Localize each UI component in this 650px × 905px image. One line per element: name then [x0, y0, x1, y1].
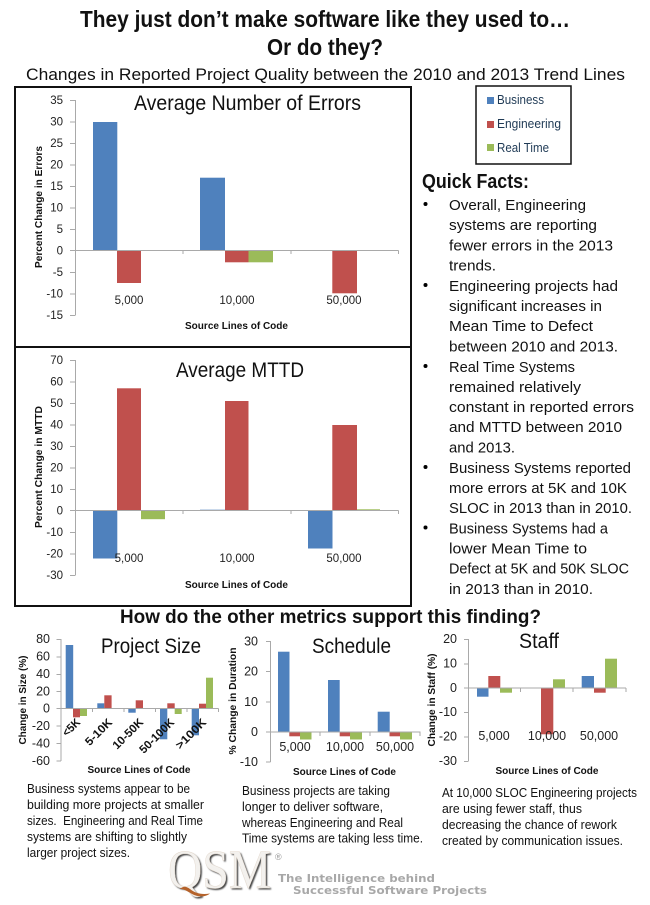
panel: staff	[426, 630, 637, 848]
category labels: errors: 5,000	[115, 295, 143, 307]
y axis labels: errors: -10	[46, 288, 63, 300]
y axis labels: MTTD: -10	[46, 527, 63, 539]
category labels: staff	[478, 729, 618, 743]
y axis labels: staff: 20	[443, 632, 457, 646]
logo: QSM: QSM	[170, 840, 272, 902]
chart title: staff: Staff	[519, 630, 559, 653]
commentary: schedule: Business projects are taking	[242, 784, 390, 798]
y axis labels: MTTD: 70	[50, 355, 63, 367]
commentary: schedule: Time systems are taking less time.	[242, 832, 423, 846]
panel: schedule	[227, 634, 423, 846]
y axis labels: MTTD: -20	[46, 548, 63, 560]
x axis title: staff: Source Lines of Code	[496, 765, 599, 777]
y axis title: staff: Change in Staff (%)	[426, 654, 438, 746]
legend: Engineering	[497, 117, 561, 131]
panel: project size	[17, 632, 218, 860]
quick facts list: in 2013 than in 2010.	[449, 581, 593, 598]
y axis labels: MTTD	[46, 355, 63, 582]
quick facts list: fewer errors in the 2013	[449, 237, 613, 254]
quick facts list: significant increases in	[449, 298, 602, 315]
category labels: errors: 10,000	[219, 295, 255, 307]
x axis title: MTTD: Source Lines of Code	[185, 579, 288, 591]
quick facts list	[424, 197, 634, 598]
title: Or do they?	[267, 34, 383, 60]
y axis labels: errors	[46, 95, 63, 322]
quick facts list: and 2013.	[449, 439, 515, 456]
chart title: errors: Average Number of Errors	[134, 92, 361, 115]
category labels: schedule: 10,000	[326, 740, 364, 754]
bar chart: staff	[464, 639, 626, 762]
quick facts list: Overall, Engineering	[449, 197, 586, 214]
y axis labels: errors: 15	[50, 181, 63, 193]
title: They just don’t make software like they used to…	[80, 6, 570, 32]
y axis labels: errors: 0	[57, 246, 63, 258]
rotated category labels: size: 5-10K	[83, 716, 116, 748]
bar chart: errors	[70, 100, 398, 316]
legend: Real Time	[497, 141, 549, 155]
category labels: MTTD: 10,000	[219, 553, 255, 565]
category labels: errors: 50,000	[326, 295, 362, 307]
subtitle: Changes in Reported Project Quality between the 2010 and 2013 Trend Lines	[26, 66, 625, 84]
y axis labels: MTTD: 30	[50, 441, 63, 453]
commentary: size: larger project sizes.	[27, 846, 130, 860]
legend	[476, 86, 571, 164]
y axis labels: MTTD: 10	[50, 484, 63, 496]
y axis labels: staff: 0	[450, 681, 457, 695]
commentary: staff: created by communication issues.	[442, 834, 623, 848]
category labels: staff: 50,000	[580, 729, 618, 743]
y axis title: errors: Percent Change in Errors	[33, 146, 45, 268]
y axis labels: errors: 10	[50, 202, 63, 214]
rotated category labels: size	[60, 716, 210, 756]
bar chart: project size	[56, 639, 218, 761]
y axis labels: staff: -30	[439, 754, 457, 768]
y axis labels: size: 80	[36, 632, 50, 646]
quick facts list: remained relatively	[449, 379, 582, 396]
commentary: staff: At 10,000 SLOC Engineering projects	[442, 786, 637, 800]
y axis labels: MTTD: 50	[50, 398, 63, 410]
commentary: staff	[442, 786, 637, 848]
category labels: errors	[115, 295, 362, 307]
y axis labels: MTTD: 0	[57, 506, 63, 518]
quick facts list: Business Systems reported	[449, 460, 631, 477]
y axis labels: errors: 5	[57, 224, 63, 236]
y axis labels: size: 60	[36, 649, 50, 663]
quick facts list: Engineering projects had	[449, 278, 618, 295]
y axis labels: schedule: -10	[240, 755, 258, 769]
y axis labels: errors: 25	[50, 138, 63, 150]
quick facts list: lower Mean Time to	[449, 540, 587, 558]
tagline: The Intelligence behind	[278, 872, 435, 885]
category labels: MTTD: 5,000	[115, 553, 143, 565]
section heading: How do the other metrics support this finding?	[120, 607, 541, 628]
y axis labels: size: -40	[32, 736, 50, 750]
y axis labels: MTTD: 20	[50, 462, 63, 474]
commentary: size: building more projects at smaller	[27, 798, 204, 812]
tagline	[278, 872, 487, 897]
commentary: size: systems are shifting to slightly	[27, 830, 188, 844]
y axis labels: size: 20	[36, 684, 50, 698]
y axis labels: size: 40	[36, 667, 50, 681]
bar chart: schedule	[266, 641, 420, 762]
quick facts list: constant in reported errors	[449, 399, 634, 416]
rotated category labels: size: 50-100K	[138, 716, 178, 756]
quick facts list: Defect at 5K and 50K SLOC	[449, 561, 629, 578]
rotated category labels: size: <5K	[60, 716, 84, 739]
x axis title: size: Source Lines of Code	[88, 764, 191, 776]
y axis labels: staff: -20	[439, 730, 457, 744]
category labels: schedule: 50,000	[376, 740, 414, 754]
y axis labels: schedule: 30	[244, 634, 258, 648]
y axis labels: schedule: 10	[244, 695, 258, 709]
y axis labels: staff: 10	[443, 656, 457, 670]
category labels: schedule: 5,000	[279, 740, 311, 754]
commentary: size: Business systems appear to be	[27, 782, 190, 796]
y axis labels: schedule: 20	[244, 664, 258, 678]
y axis title: size: Change in Size (%)	[17, 656, 29, 744]
x axis title: schedule: Source Lines of Code	[293, 766, 396, 778]
quick facts list: SLOC in 2013 than in 2010.	[449, 500, 632, 517]
tagline: Successful Software Projects	[293, 884, 487, 897]
title	[80, 6, 570, 60]
y axis labels: errors: 20	[50, 160, 63, 172]
rotated category labels: size: 10-50K	[111, 716, 147, 752]
legend: Business	[497, 93, 544, 107]
x axis title: errors: Source Lines of Code	[185, 320, 288, 332]
quick facts list: between 2010 and 2013.	[449, 338, 618, 356]
y axis title: schedule: % Change in Duration	[227, 648, 239, 754]
y axis labels: MTTD: -30	[46, 570, 63, 582]
logo: QSM: ®	[275, 852, 282, 862]
y axis labels: schedule	[240, 634, 258, 769]
y axis labels: errors: -5	[53, 267, 63, 279]
quick facts list: more errors at 5K and 10K	[449, 480, 627, 497]
y axis labels: MTTD: 40	[50, 420, 63, 432]
y axis labels: staff	[439, 632, 457, 768]
panel: average number of errors	[15, 87, 411, 347]
commentary: size	[27, 782, 204, 860]
commentary: schedule: longer to deliver software,	[242, 800, 383, 814]
y axis labels: schedule: 0	[251, 725, 258, 739]
commentary: schedule	[241, 784, 423, 846]
quick facts list: Mean Time to Defect	[449, 318, 594, 335]
quick facts list: Real Time Systems	[449, 359, 575, 376]
y axis labels: size	[32, 632, 50, 768]
quick facts heading: Quick Facts:	[422, 171, 529, 193]
commentary: staff: are using fewer staff, thus	[442, 802, 582, 816]
commentary: staff: decreasing the chance of rework	[442, 818, 618, 832]
quick facts list: and MTTD between 2010	[449, 419, 622, 436]
y axis labels: staff: -10	[439, 705, 457, 719]
y axis labels: errors: -15	[46, 310, 63, 322]
y axis labels: MTTD: 60	[50, 376, 63, 388]
panel: average MTTD	[15, 347, 411, 606]
category labels: staff: 5,000	[478, 729, 510, 743]
chart title: MTTD: Average MTTD	[176, 359, 304, 382]
chart title: schedule: Schedule	[312, 635, 391, 658]
logo: QSM: QSM	[168, 839, 271, 900]
quick facts list: Business Systems had a	[449, 520, 609, 538]
chart title: project size: Project Size	[101, 635, 201, 658]
quick facts list: systems are reporting	[449, 217, 597, 234]
y axis labels: errors: 30	[50, 116, 63, 128]
category labels: schedule	[279, 740, 414, 754]
commentary: size: sizes. Engineering and Real Time	[27, 814, 203, 828]
y axis labels: size: 0	[43, 702, 50, 716]
bar chart: MTTD	[70, 360, 398, 576]
category labels: MTTD: 50,000	[326, 553, 362, 565]
y axis labels: size: -60	[32, 754, 50, 768]
category labels: MTTD	[115, 553, 362, 565]
rotated category labels: size: >100K	[174, 716, 210, 752]
commentary: schedule: whereas Engineering and Real	[241, 816, 403, 830]
category labels: staff: 10,000	[528, 729, 566, 743]
y axis labels: errors: 35	[50, 95, 63, 107]
y axis labels: size: -20	[32, 719, 50, 733]
y axis title: MTTD: Percent Change in MTTD	[33, 406, 45, 528]
quick facts list: trends.	[449, 258, 496, 275]
